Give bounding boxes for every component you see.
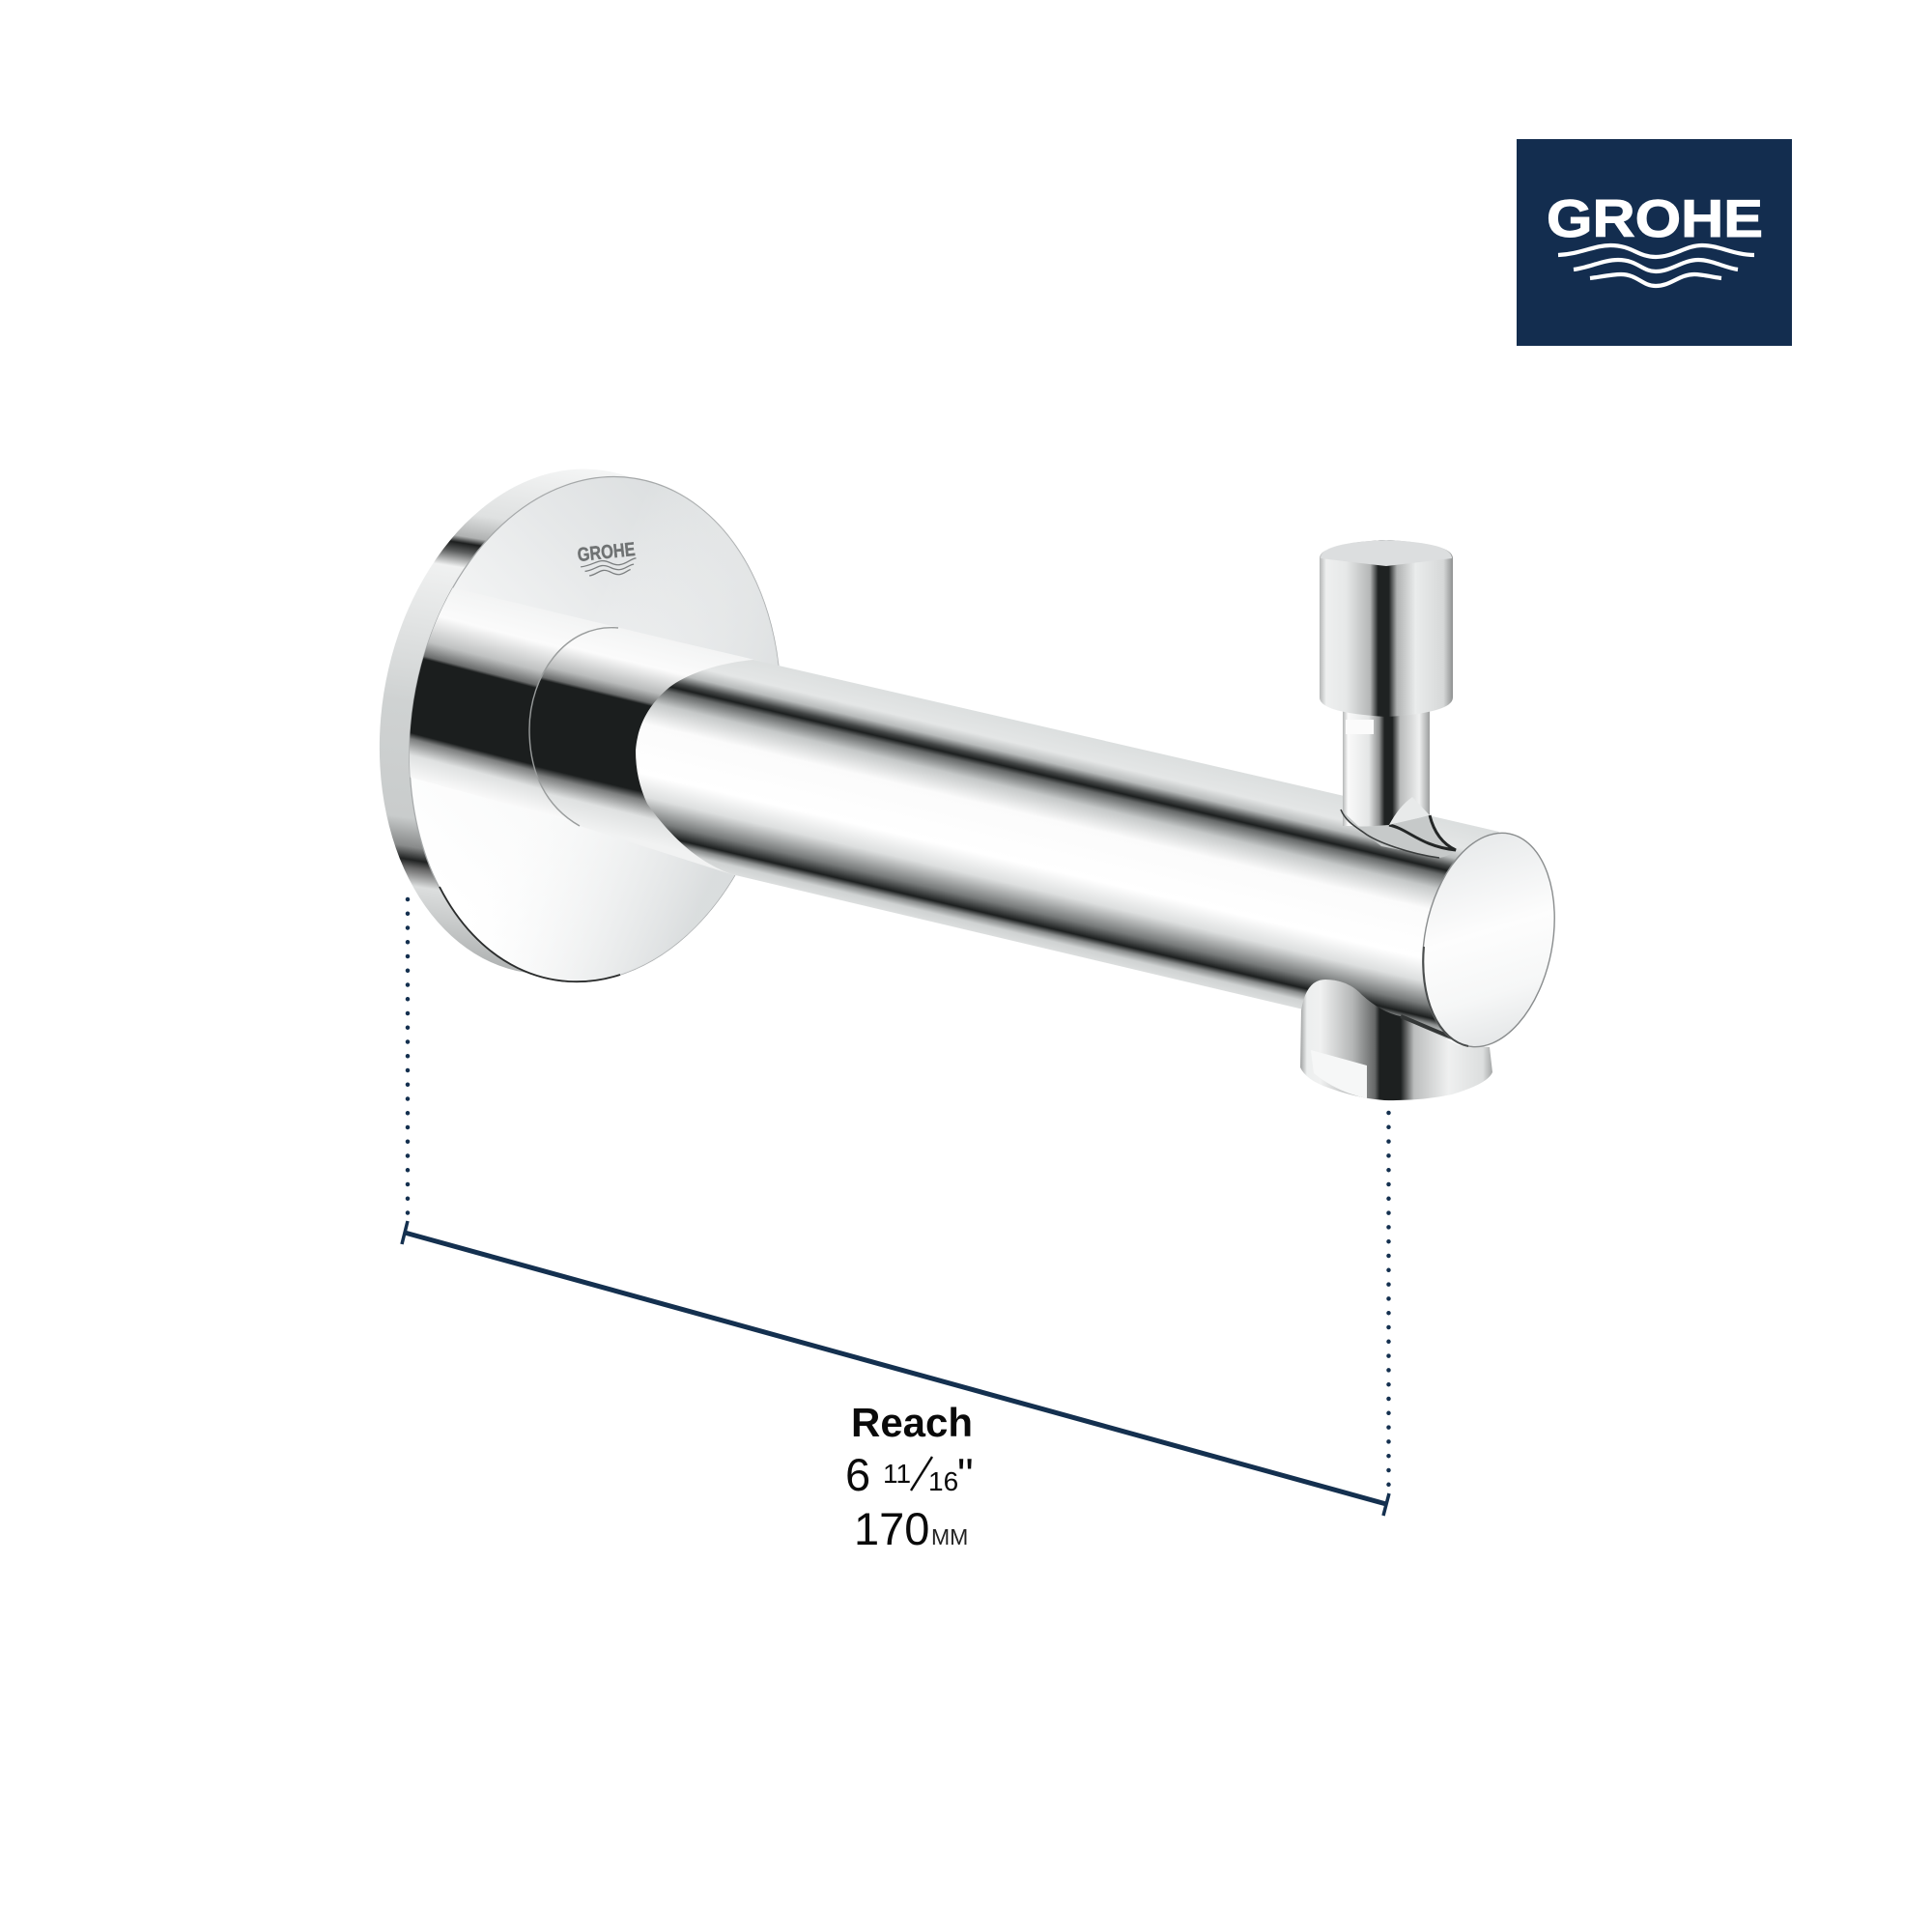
dimension: reach xyxy=(402,899,1389,1516)
label: reach measurement: MM xyxy=(931,1524,968,1549)
label: reach measurement: 11 xyxy=(883,1459,911,1489)
label: reach measurement: 6 xyxy=(845,1449,870,1500)
logo: GROHE brand badge xyxy=(1517,139,1792,346)
label: reach measurement: " xyxy=(957,1449,974,1500)
spout body pipe xyxy=(636,660,1499,1045)
diverter stem xyxy=(1341,710,1456,858)
dotted guide right xyxy=(1386,1113,1391,1492)
end cap xyxy=(1406,821,1572,1059)
engraved plate logo xyxy=(577,539,638,579)
dotted guide left xyxy=(406,899,410,1215)
logo wordmark: GROHE xyxy=(1547,188,1763,248)
label: reach measurement: 170 xyxy=(854,1503,929,1554)
label: reach measurement xyxy=(845,1400,974,1554)
wall plate with rim xyxy=(344,442,816,1009)
label: reach measurement: Reach xyxy=(851,1400,973,1445)
stem base flare xyxy=(1341,810,1456,858)
neck between plate and collar xyxy=(410,587,612,809)
diverter knob xyxy=(1320,540,1453,717)
collar edge xyxy=(529,628,618,826)
product: chrome tub spout xyxy=(344,442,1572,1100)
logo waves xyxy=(1558,245,1754,286)
collar section xyxy=(529,628,773,884)
dimension line xyxy=(402,1221,1389,1516)
water outlet xyxy=(1300,980,1492,1100)
engraved plate logo: GROHE xyxy=(577,539,637,566)
label: reach measurement: 16 xyxy=(928,1466,958,1496)
